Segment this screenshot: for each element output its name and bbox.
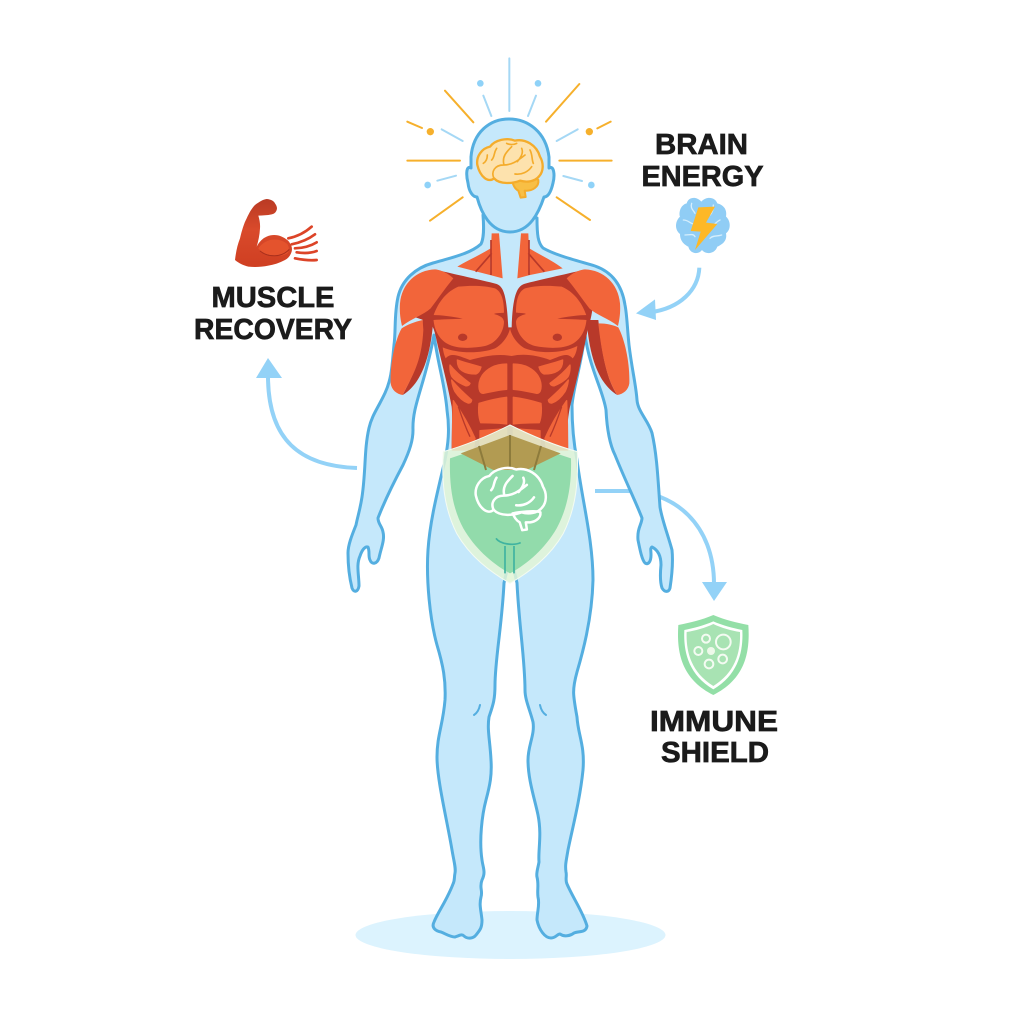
shield inner green [450, 435, 571, 573]
olive muscle overlap [461, 435, 561, 470]
gut brain outline icon [476, 468, 546, 530]
arrow: gut to immune shield [595, 491, 727, 601]
icon: brain with lightning bolt [676, 198, 730, 253]
arrow: brain energy to head [636, 268, 699, 320]
knee creases [474, 705, 546, 715]
callout: muscle recovery [194, 199, 352, 346]
label: brain energy: ENERGY [642, 161, 764, 193]
head [467, 119, 554, 232]
blue rays [437, 58, 582, 181]
orange rays [407, 84, 612, 221]
label: muscle recovery: RECOVERY [194, 314, 352, 346]
ray dots [424, 80, 595, 188]
torso muscle base [413, 269, 593, 450]
deltoids [400, 269, 620, 326]
ground shadow ellipse [356, 911, 666, 959]
callout: brain energy [642, 129, 764, 253]
icon: immune shield with cells [678, 615, 749, 695]
label: brain energy: BRAIN [655, 129, 748, 161]
groin lines [496, 538, 521, 573]
body silhouette [348, 215, 672, 938]
arrow: body to muscle recovery [256, 358, 357, 468]
shield outer border [443, 425, 578, 583]
muscular system on upper body [391, 233, 629, 450]
label: muscle recovery: MUSCLE [212, 282, 334, 314]
human body figure [348, 119, 672, 938]
icon: golden brain in head [477, 139, 543, 198]
abdominal muscles [443, 328, 577, 450]
gut shield overlay [443, 425, 578, 583]
head radiating energy rays [407, 58, 612, 221]
upper arm muscles [391, 319, 629, 395]
pectoral muscles [432, 286, 588, 348]
label: immune shield: IMMUNE [650, 706, 778, 738]
side abdominal fibre lines [458, 407, 562, 437]
callout: immune shield [650, 615, 778, 769]
icon: flexed bicep [235, 199, 317, 267]
neck and trapezius muscles [457, 233, 563, 278]
label: immune shield: SHIELD [661, 737, 769, 769]
